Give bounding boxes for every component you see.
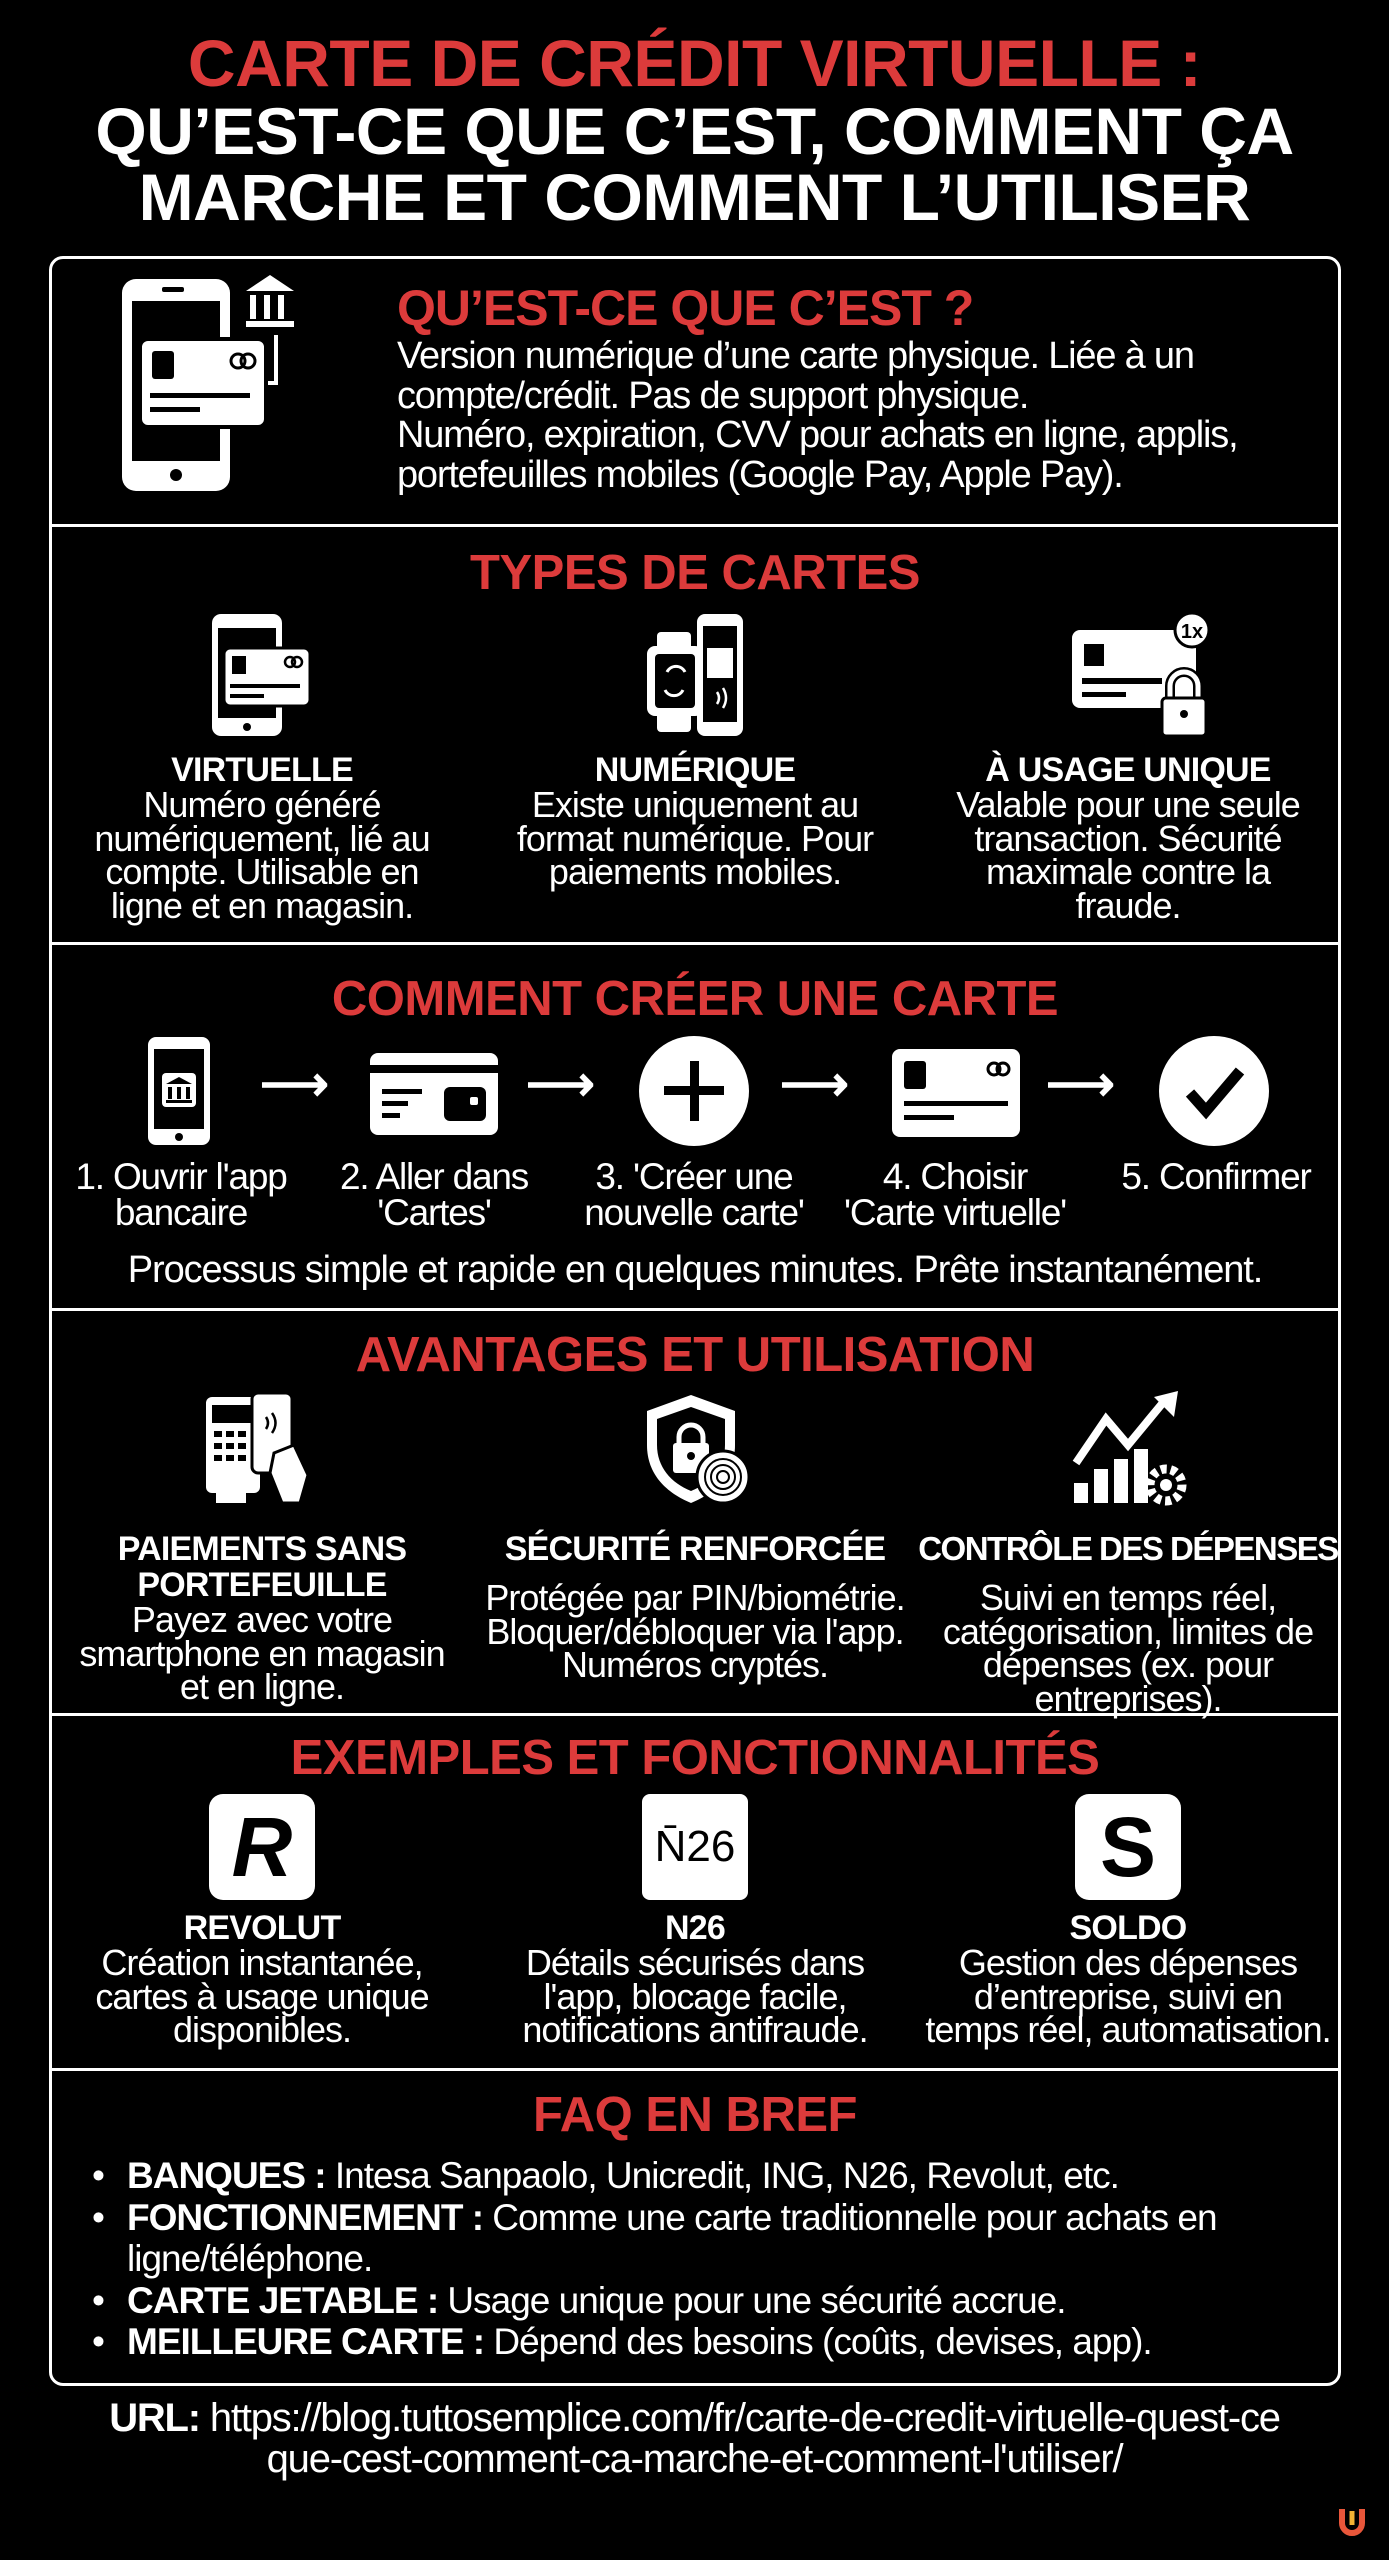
section: how to create (75, 971, 1312, 1291)
faq list: • (92, 2280, 104, 2320)
col numerique (517, 614, 874, 892)
heading: FAQ EN BREF (533, 2088, 857, 2142)
icon: phone with card and bank (122, 275, 294, 491)
url footer: URL: https://blog.tuttosemplice.com/fr/carte-de-credit-virtuelle-quest-ce (109, 2396, 1280, 2440)
faq list: BANQUES : Intesa Sanpaolo, Unicredit, ING, N26, Revolut, etc. (127, 2155, 1119, 2196)
col virtuelle: numériquement, lié au (94, 818, 430, 858)
step labels: 3. 'Créer une (595, 1156, 793, 1197)
faq list: MEILLEURE CARTE : Dépend des besoins (coûts, devises, app). (127, 2321, 1152, 2362)
col soldo: S (1100, 1800, 1156, 1894)
step labels: 'Carte virtuelle' (844, 1192, 1066, 1233)
col spending: entreprises). (1034, 1678, 1222, 1718)
col spending: dépenses (ex. pour (983, 1644, 1273, 1685)
step icons: ⟶ (260, 1058, 329, 1111)
col soldo (925, 1794, 1331, 2050)
text: Version numérique d’une carte physique. Liée à un (397, 335, 1194, 377)
col revolut: REVOLUT (184, 1909, 340, 1947)
step icons: ⟶ (1046, 1058, 1115, 1111)
text: portefeuilles mobiles (Google Pay, Apple Pay). (397, 454, 1123, 496)
col usage unique: 1x (1181, 621, 1203, 643)
col payments: smartphone en magasin (79, 1632, 445, 1674)
col numerique: Existe uniquement au (532, 784, 858, 825)
title: QU’EST-CE QUE C’EST, COMMENT ÇA (95, 94, 1294, 168)
col soldo: SOLDO (1070, 1909, 1186, 1947)
col usage unique: maximale contre la (986, 851, 1270, 892)
col usage unique (956, 614, 1300, 926)
step labels: 'Cartes' (377, 1192, 491, 1233)
col revolut: Création instantanée, (101, 1942, 423, 1983)
col payments: PORTEFEUILLE (137, 1566, 387, 1604)
section: faq (92, 2088, 1217, 2362)
title (95, 26, 1294, 234)
step labels: 1. Ouvrir l'app (75, 1156, 287, 1197)
col security: Numéros cryptés. (562, 1644, 828, 1685)
step icons (148, 1036, 1269, 1146)
text (397, 335, 1237, 496)
col revolut (95, 1794, 429, 2050)
faq list: CARTE JETABLE : Usage unique pour une sécurité accrue. (127, 2280, 1066, 2320)
col spending: Suivi en temps réel, (980, 1577, 1276, 1618)
col n26: N̄26 (655, 1822, 735, 1871)
col n26: notifications antifraude. (522, 2009, 868, 2050)
col virtuelle: Numéro généré (143, 784, 381, 825)
col virtuelle: ligne et en magasin. (111, 884, 413, 926)
col numerique: paiements mobiles. (549, 851, 841, 892)
step labels: 2. Aller dans (340, 1156, 528, 1197)
title: CARTE DE CRÉDIT VIRTUELLE : (188, 26, 1201, 100)
col usage unique: Valable pour une seule (956, 784, 1300, 825)
col soldo: Gestion des dépenses (959, 1942, 1297, 1983)
col security: Bloquer/débloquer via l'app. (486, 1610, 904, 1652)
step labels: bancaire (115, 1192, 247, 1233)
col virtuelle: VIRTUELLE (171, 751, 353, 789)
text: Numéro, expiration, CVV pour achats en ligne, applis, (397, 414, 1237, 456)
col spending (918, 1391, 1338, 1718)
title: MARCHE ET COMMENT L’UTILISER (139, 160, 1250, 234)
faq list: FONCTIONNEMENT : Comme une carte traditionnelle pour achats en ligne/téléphone. (127, 2196, 1217, 2279)
step labels: 5. Confirmer (1121, 1156, 1311, 1197)
col numerique: NUMÉRIQUE (595, 751, 795, 789)
section: advantages (79, 1328, 1338, 1718)
col n26 (522, 1794, 868, 2050)
step labels: nouvelle carte' (584, 1192, 804, 1233)
col usage unique: transaction. Sécurité (974, 818, 1282, 858)
col revolut: cartes à usage unique (95, 1976, 429, 2016)
col virtuelle: compte. Utilisable en (105, 851, 419, 892)
col spending: CONTRÔLE DES DÉPENSES (918, 1530, 1338, 1567)
heading: EXEMPLES ET FONCTIONNALITÉS (291, 1731, 1099, 1785)
col n26: N26 (665, 1909, 725, 1947)
col spending: catégorisation, limites de (943, 1610, 1313, 1652)
faq list: • (92, 2321, 104, 2362)
col soldo: d’entreprise, suivi en (974, 1976, 1282, 2016)
faq list: • (92, 2196, 104, 2238)
step icons: ⟶ (780, 1058, 849, 1111)
step icons: ⟶ (526, 1058, 595, 1111)
section: examples (95, 1730, 1331, 2050)
col usage unique: fraude. (1075, 884, 1181, 926)
col n26: l'app, blocage facile, (543, 1976, 847, 2016)
faq list: • (92, 2155, 104, 2196)
col security: SÉCURITÉ RENFORCÉE (505, 1530, 885, 1568)
col n26: Détails sécurisés dans (526, 1942, 864, 1983)
section: what is it (122, 275, 1237, 496)
step labels (75, 1156, 1312, 1233)
faq list (92, 2155, 1217, 2362)
url footer: que-cest-comment-ca-marche-et-comment-l'utiliser/ (267, 2437, 1122, 2481)
col soldo: temps réel, automatisation. (925, 2009, 1331, 2050)
col revolut: disponibles. (173, 2009, 351, 2050)
logo (1339, 2509, 1365, 2536)
heading: AVANTAGES ET UTILISATION (356, 1328, 1034, 1382)
heading: TYPES DE CARTES (470, 546, 920, 600)
col payments: et en ligne. (180, 1666, 344, 1707)
col virtuelle (94, 614, 430, 926)
col payments: PAIEMENTS SANS (118, 1530, 406, 1568)
footnote: Processus simple et rapide en quelques minutes. Prête instantanément. (128, 1249, 1262, 1291)
col numerique: format numérique. Pour (517, 818, 873, 858)
url footer (109, 2396, 1280, 2481)
col usage unique: À USAGE UNIQUE (985, 751, 1271, 789)
col payments (79, 1394, 445, 1707)
col security (485, 1395, 905, 1685)
section: types (94, 546, 1300, 926)
col security: Protégée par PIN/biométrie. (485, 1577, 905, 1618)
step labels: 4. Choisir (883, 1156, 1027, 1197)
text: compte/crédit. Pas de support physique. (397, 374, 1028, 416)
heading: COMMENT CRÉER UNE CARTE (332, 972, 1058, 1026)
col payments: Payez avec votre (132, 1599, 392, 1640)
col revolut: R (232, 1800, 292, 1894)
heading: QU’EST-CE QUE C’EST ? (397, 280, 973, 336)
main panel (49, 256, 1341, 2386)
